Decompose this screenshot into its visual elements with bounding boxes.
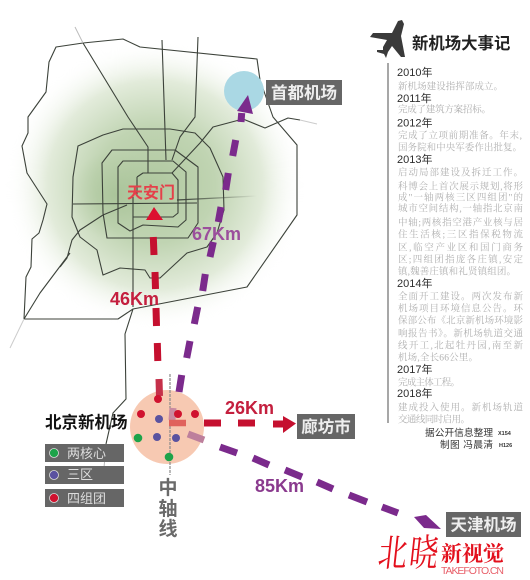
fourth ring xyxy=(102,150,198,238)
timeline text: 2010年 xyxy=(397,65,432,79)
faded north-west tail xyxy=(75,27,83,43)
timeline text: 完成了建筑方案招标。 xyxy=(398,104,491,116)
Capital airport label xyxy=(266,80,342,105)
timeline heading: 新机场大事记 xyxy=(412,34,510,53)
distance label 85Km: 85Km xyxy=(255,476,304,496)
timeline text: 2018年 xyxy=(397,386,432,400)
timeline text: 全面开工建设。两次发布新 xyxy=(398,290,523,302)
timeline text: 2011年 xyxy=(397,91,432,105)
logo: Beiwan new vision xyxy=(376,532,504,577)
timeline text: 交通线同时启用。 xyxy=(398,414,470,426)
Tianjin airport label xyxy=(446,512,521,537)
city centre glow xyxy=(70,150,160,240)
timeline text: 住生活核;三区指保税物流 xyxy=(398,228,523,240)
central axis label xyxy=(158,477,178,540)
central axis label: 中 xyxy=(158,477,178,499)
credits: X154 xyxy=(498,431,512,437)
timeline text: 成"一轴两核三区四组团"的 xyxy=(398,192,523,204)
legend: two cores: 两核心 xyxy=(67,446,106,461)
credits: 据公开信息整理 xyxy=(425,426,493,439)
third ring xyxy=(118,161,186,231)
east road xyxy=(177,196,257,200)
Tianjin airport label: 天津机场 xyxy=(450,516,516,534)
timeline text: 城市空间结构,一轴指北京南 xyxy=(398,202,523,214)
Capital airport label: 首都机场 xyxy=(271,82,337,102)
Tiananmen label: 天安门 xyxy=(127,184,175,202)
timeline text: 2013年 xyxy=(397,152,432,166)
timeline text: 科博会上首次展示规划,将形 xyxy=(398,180,523,192)
legend: four clusters: 四组团 xyxy=(67,491,106,506)
Capital airport circle xyxy=(224,71,264,111)
central axis label: 线 xyxy=(158,518,178,540)
credits: H126 xyxy=(499,443,512,449)
timeline text: 完成主体工程。 xyxy=(398,376,460,388)
cross roads xyxy=(73,197,197,307)
timeline rule xyxy=(387,63,389,423)
timeline text: 中轴;两核指空港产业核与居 xyxy=(398,216,523,228)
legend xyxy=(45,444,124,507)
central axis line xyxy=(169,374,171,475)
timeline text: 国务院和中央军委作出批复。 xyxy=(398,142,522,154)
route to Capital airport: 67Km xyxy=(172,95,253,420)
logo: Beiwan new vision: 晓 xyxy=(407,532,441,575)
north road xyxy=(162,40,166,160)
Daxing airport circle xyxy=(130,390,204,464)
timeline text xyxy=(397,65,523,426)
Langfang label xyxy=(297,414,355,439)
timeline text: 区;四组团指庞各庄镇,安定 xyxy=(398,254,523,266)
Daxing airport dots xyxy=(134,395,199,461)
route to Langfang: 26Km xyxy=(169,416,296,433)
map: Beijing roads and urban glow xyxy=(5,27,317,480)
distance label 26Km: 26Km xyxy=(225,398,274,418)
north-east road xyxy=(172,118,300,173)
faded road tail xyxy=(103,444,106,480)
logo: Beiwan new vision: 北 xyxy=(376,534,410,575)
timeline text: 保部公布《北京新机场环境影 xyxy=(398,314,523,326)
timeline text: 建成投入使用。新机场轨道 xyxy=(398,402,523,414)
second ring xyxy=(133,173,178,217)
timeline text: 区,临空产业区和国门商务 xyxy=(398,242,523,254)
south road xyxy=(106,309,133,444)
distance label 67Km: 67Km xyxy=(192,224,241,244)
fifth ring xyxy=(72,129,224,278)
logo: Beiwan new vision: TAKEFOTO.CN xyxy=(441,565,504,577)
central axis label: 轴 xyxy=(158,498,178,520)
credits xyxy=(425,426,512,451)
timeline text: 2012年 xyxy=(397,116,432,130)
icon: airplane xyxy=(370,20,405,58)
timeline text: 机场项目环境信息公告。环 xyxy=(398,302,523,314)
timeline text: 2017年 xyxy=(397,362,432,376)
route to Tianjin airport: 85Km xyxy=(188,434,441,529)
timeline text: 启动局部建设及拆迁工作。 xyxy=(398,166,523,178)
west road xyxy=(24,205,127,319)
timeline text: 机场,全长66公里。 xyxy=(398,352,478,364)
municipal boundary xyxy=(22,39,297,319)
north-west road xyxy=(83,43,148,173)
north-north-east road xyxy=(172,37,198,160)
timeline text: 响报告书》。新机场轨道交通 xyxy=(398,328,523,340)
faded north-east tail xyxy=(300,120,317,124)
timeline text: 2014年 xyxy=(397,276,432,290)
logo: Beiwan new vision: 新视觉 xyxy=(441,542,504,566)
Langfang label: 廊坊市 xyxy=(301,416,351,436)
timeline text: 镇,魏善庄镇和礼贤镇组团。 xyxy=(398,266,516,278)
Tiananmen marker triangle xyxy=(146,207,163,220)
distance label 46Km: 46Km xyxy=(110,289,159,309)
timeline text: 完成了立项前期准备。年末, xyxy=(398,130,522,142)
faded west tail xyxy=(10,319,24,348)
route to Tiananmen: 46Km xyxy=(153,237,160,396)
credits: 制图 冯晨清 xyxy=(440,438,493,451)
Beijing new airport heading: 北京新机场 xyxy=(45,412,128,432)
timeline text: 线开工,北起牡丹园,南至新 xyxy=(398,340,523,352)
urban glow xyxy=(5,40,305,330)
legend: three zones: 三区 xyxy=(67,467,93,482)
timeline text: 新机场建设指挥部成立。 xyxy=(398,80,503,92)
